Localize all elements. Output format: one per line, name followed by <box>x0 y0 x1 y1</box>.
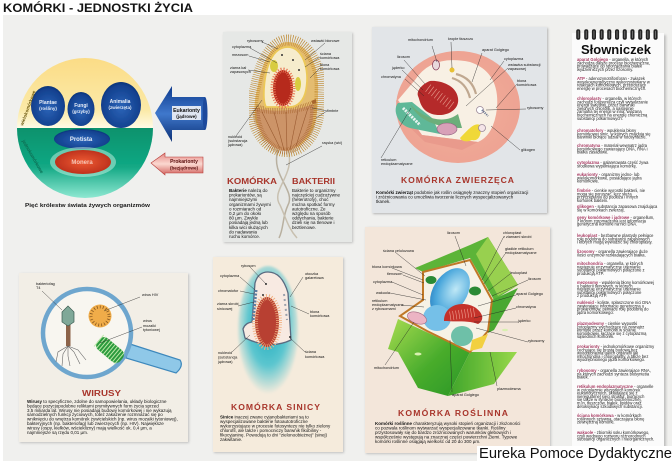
virus text: bakteryjnych (np. bakteriofag) lub zwierzęcych (np. HIV). Największe <box>27 421 164 426</box>
glossary entries: cechujące się prostą budową bez <box>577 347 638 352</box>
plant cell labels: aparat Golgiego <box>452 393 479 397</box>
glossary entries: genetyczna komórki na nici DNA. <box>577 222 637 227</box>
glossary entries: wysokoenergetyczny wykorzystywany w <box>577 79 650 84</box>
glossary entries: na których zachodzi synteza biosyntetia <box>577 371 650 376</box>
arrow: eukarionty <box>155 86 208 142</box>
glossary entries: mezosomy - wpuklenia błony komórkowej <box>577 280 654 285</box>
bacteria text: do nadawania <box>229 229 258 234</box>
glossary entries: wakuole - zbiorniki soku komórkowego, <box>576 430 649 435</box>
side labels: wielokomórkowe <box>19 89 37 127</box>
glossary entries: białek. <box>577 375 589 380</box>
glossary entries: lizosomy - organella zawierające duże <box>577 249 649 254</box>
kingdom labels: (rośliny) <box>39 106 57 111</box>
glossary entries: zamiana tej energii w inną, wiązaną <box>577 109 642 114</box>
glossary entries: czyli wodnego roztworu różnorodnych <box>577 433 646 438</box>
glossary entries: środkowa wypełniająca komórkę. <box>577 163 637 168</box>
animal cell labels: błona <box>517 79 527 83</box>
plant cell labels <box>372 231 545 397</box>
animal cell text: Komórki zwierząt podobnie jak roślin osiągnęły znaczny stopień organizacji <box>376 190 528 195</box>
kingdom labels: Animalia <box>110 99 131 105</box>
bacteria text: autotroficzne. Ze <box>292 206 326 211</box>
glossary entries: geny komórkowe i jądrowe - organellum, <box>577 215 654 220</box>
plant cell labels: chromatyna <box>516 305 537 309</box>
glossary entries: substancji pokarmowych. <box>577 116 623 121</box>
plant cell drawing <box>388 237 518 396</box>
glossary entries: mitochondria i chloroplasty, a także bez <box>577 354 648 359</box>
virus text: najmniejsze są rzędu 0,01 µm. <box>27 430 88 435</box>
cyanobacteria labels: sinicowej <box>217 307 233 311</box>
animal cell labels: endoplazmatyczne <box>381 162 413 166</box>
bacteria labels: komórkowa <box>320 56 340 60</box>
virus labels: wirus <box>143 319 152 323</box>
bacteria labels: fimbrie <box>327 109 338 113</box>
glossary entries: substancji organicznych i nieorganicznych. <box>577 437 654 442</box>
bacteria text: najmniejszymi <box>229 197 257 202</box>
glossary entries: rolę podobną do substancji zapasowych <box>577 236 650 241</box>
glossary entries: ATP - adenozynotrifosforan - związek <box>577 76 646 81</box>
bacteria heading <box>227 175 335 186</box>
glossary entries: glikogen - substancja zapasowa znajdująca <box>577 204 658 209</box>
plant cell labels: gładkie retikulum <box>505 247 534 251</box>
plant cell labels: plazmodesma <box>497 387 522 391</box>
animal cell labels <box>381 37 544 166</box>
glossary entries: zachodzi fotosynteza czyli wytwarzanie <box>577 99 649 104</box>
arrow: prokarionty: (bezjądrowe) <box>170 166 199 170</box>
plant cell text: komórki roślinne osiągają wielkość od 20 do 300 µm. <box>375 439 480 444</box>
cyanobacteria text: zakwitanie. <box>220 437 242 442</box>
plant cell labels: endoplazmatyczne <box>372 303 404 307</box>
cyanobacteria text: Sinice inaczej zwane cyjanobakteriami są to <box>220 414 309 420</box>
glossary entries: retikulum endoplazmatyczne - organelle <box>577 384 654 389</box>
glossary entries: wyodrębnionego jądra komórkowego. <box>577 357 645 362</box>
glossary entries: nieregularnej sieci struktur, biorących <box>577 394 645 399</box>
plant cell labels: chloroplast <box>503 231 522 235</box>
glossary entries: następuje enzymatyczne utlenianie <box>577 287 641 292</box>
glossary entries: ściana komórkowa - w komórkach <box>577 413 642 418</box>
cyanobacteria labels: ziarna skrobi <box>217 302 239 306</box>
glossary entries: mogą się poruszać, lecz służą <box>577 191 632 196</box>
glossary entries: z którym zgromadzona jest informacja <box>577 218 647 223</box>
plant cell text: co pozwala roślinom wytwarzać wyspecjalizowane tkanki. Rośliny <box>375 426 506 430</box>
glossary entries: chloroplasty - organella, w których <box>577 96 642 101</box>
bacteria text: Bakterie należą do <box>229 188 268 193</box>
virus labels: tytoniowej <box>143 328 160 332</box>
glossary entries: się w komórkach zwierząt. <box>577 207 625 212</box>
virus text: będące pozycjopodobne reliktami prymitywnych form życia sprzed <box>27 403 159 408</box>
glossary entries: jądra komórkowego. <box>576 310 614 315</box>
glossary entries: u bakterii tlenowych, w których <box>577 283 633 288</box>
glossary entries: zachodzą dalsze procesy biochemiczne, <box>577 60 650 65</box>
plant cell labels: tlenosom <box>387 272 402 276</box>
glossary entries: cytoplazma - galaretowata część żywa <box>577 160 649 165</box>
cyanobacteria labels: cytoplazma <box>220 274 240 278</box>
bacteria labels: ziarna kał <box>230 66 246 70</box>
cyanobacteria labels: błona <box>310 310 320 314</box>
bacteria text: dzieli się na tlenowe i <box>292 220 335 225</box>
virus text <box>27 399 178 435</box>
panel: five kingdoms diagram <box>17 58 208 209</box>
glossary entries: następuje enzymatyczne utlenianie <box>577 264 641 269</box>
plant cell labels: aparat Golgiego <box>516 292 543 296</box>
panel: plant cell <box>365 227 551 454</box>
cyanobacteria text: wyspecjalizowane bakterie fotoautotroficzne <box>220 419 308 424</box>
animal cell labels: cytoplazma <box>504 57 524 61</box>
cyanobacteria drawing <box>238 266 298 394</box>
plant cell labels: błona komórkowa <box>372 265 403 269</box>
bacteria labels: (substancja <box>228 139 248 143</box>
animal cell labels: krople tłuszczu <box>448 37 473 41</box>
kingdom labels: Monera <box>71 160 93 166</box>
glossary entries: m.in. tłuszczów, białek, lipidów oraz <box>577 400 641 406</box>
bacteria labels: ściana <box>320 52 332 56</box>
glossary entries: w cytoplazmie wszystkich komórek <box>577 387 641 392</box>
cyanobacteria labels: rybosom <box>241 264 256 268</box>
plant cell text <box>375 421 520 444</box>
arrow: prokarionty: Prokarionty <box>170 159 198 165</box>
glossary entries: roślinnych sztywna, otaczająca błonę <box>577 416 645 421</box>
cyanobacteria text <box>220 414 331 442</box>
glossary entries: komórkowe. <box>577 179 599 184</box>
animal cell text: i zróżnicowania co umożliwia tworzenie licznych wyspecjalizowanych <box>376 194 514 200</box>
plant cell text: współcześnie występują na znacznej części powierzchni Ziemi. Typowe <box>375 434 518 440</box>
glossary entries: wielokomórkowe, posiadające jądra <box>577 175 642 180</box>
glossary entries <box>576 57 658 442</box>
bacteria text: ruchu komórce. <box>229 234 260 239</box>
animal cell labels: rybosomy <box>527 106 544 110</box>
bacteria labels: rzęska (wić) <box>322 141 343 145</box>
glossary entries: przyczepianiu do podłoża i innych <box>577 195 639 200</box>
plant cell labels: ściana celulozowa <box>383 249 415 253</box>
bacteria labels: cytoplazma <box>232 45 252 49</box>
kingdom labels <box>39 99 132 166</box>
plant cell text: przystosowały się do bardzo zróżnicowanych warunków glebowych i <box>375 430 511 435</box>
bacteria labels: komórkowa <box>320 67 340 71</box>
bacteria text: beztlenowe. <box>292 225 316 230</box>
cyanobacteria labels: nukleoid <box>218 351 232 355</box>
glossary entries: biochemicznych na energię chemiczną <box>577 112 648 118</box>
side labels: jednokomórkowe <box>21 138 45 175</box>
glossary entries: wydzielniczych przez lizosomy. <box>577 67 633 72</box>
animal cell labels: komórkowa <box>517 83 537 87</box>
glossary entries: wyodrębnienia takich organelli jak <box>577 351 639 356</box>
plant cell labels: endoplazmatyczne <box>505 251 537 255</box>
glossary entries: barwniki biorące udział w fotosyntezie. <box>577 135 647 140</box>
plant cell heading: KOMÓRKA ROŚLINNA <box>398 407 508 418</box>
title: KOMÓRKI - JEDNOSTKI ŻYCIA <box>3 2 193 15</box>
glossary entries: leukoplast - bezbarwne plastydy pełniące <box>577 233 654 238</box>
plant cell labels: cytoplazma <box>373 280 393 284</box>
notebook spiral <box>577 30 657 39</box>
animal cell text <box>376 190 528 204</box>
plant cell text: Komórki roślinne charakteryzują wysoki stopień organizacji i złożoności <box>375 421 520 426</box>
arrow: eukarionty: (jądrowe) <box>176 114 197 119</box>
cyanobacteria text: fikocyjaninę. Powodują to dni "zielonoobieżnej" (sinej) <box>220 432 328 438</box>
bacteria text: oddychania, bakterie <box>292 216 334 221</box>
plant cell labels: retikulum <box>372 299 387 303</box>
bacteria text: 0,2 µm do około <box>229 211 262 216</box>
glossary entries: zewnętrzną komórki. <box>577 420 615 425</box>
glossary entries: mitochondria - organella, w których <box>577 261 644 266</box>
bacteria text: można spotkać formy <box>292 202 336 207</box>
bacteria labels: nukleoid <box>228 135 242 139</box>
plant cell labels: z rybosomami <box>372 307 396 311</box>
virus labels: bakteriofag <box>36 282 55 286</box>
glossary entries: prokariontów, pełniące rolę podobną do <box>577 307 649 312</box>
glossary entries: komórki przez komórki w ścianie <box>577 328 637 333</box>
glossary entries: cytoplazmy wychodzące na zewnątrz <box>577 324 644 329</box>
glossary entries: komórkowej, łączące się z cytoplazmą <box>577 331 647 336</box>
panel: animal cell <box>372 27 548 214</box>
glossary entries: eukarionty - organizmy jedno- lub <box>577 172 640 177</box>
plant cell labels: rybosomy <box>528 339 545 343</box>
animal cell labels: mitochondrium <box>408 38 433 42</box>
animal cell labels: chromatyna <box>381 75 402 79</box>
arrow: prokarionty <box>151 153 203 175</box>
virus text: samodzielnych funkcji życiowych, toteż zakażenie rozmnażać się po <box>27 412 163 417</box>
glossary entries: zielonych chlorofili, a następnie <box>577 106 634 111</box>
glossary entries: aparat Golgiego - organella, w których <box>577 57 649 62</box>
glossary entries: rybosomy - organella zawierające RNA, <box>577 368 651 373</box>
glossary entries: fimbrie - cienkie wyrostki bakterii, nie <box>577 188 646 193</box>
bacteria heading: KOMÓRKA <box>227 175 277 186</box>
plant cell labels: z ziarnami skrobi <box>503 235 532 239</box>
plant cell labels: mitochondrium <box>374 366 399 370</box>
glossary entries: komórek bakterii. <box>577 198 608 203</box>
cyanobacteria labels: komórkowa <box>305 355 325 359</box>
bacteria text: Bakterie to organizmy <box>292 188 336 193</box>
bacteria text: najczęściej cudzożywne <box>292 193 341 198</box>
bacteria text: prokariontów, są <box>229 193 262 198</box>
kingdoms circle <box>17 58 153 198</box>
plant cell labels: lizosom <box>447 231 460 235</box>
panel: glossary notebook <box>572 30 666 449</box>
kingdom labels: (zwierzęta) <box>108 105 132 110</box>
bacteria labels: rybosomy <box>247 39 264 43</box>
plant cell labels: lizosom <box>528 277 541 281</box>
animal cell text: tkanek. <box>376 199 391 204</box>
bacteria text: względu na sposób <box>292 211 331 216</box>
virus labels: wirus HIV <box>142 293 159 297</box>
glossary entries: energii świetlnej, przez barwniki <box>577 103 635 108</box>
glossary entries: zawierające informacje genetyczną u <box>577 303 644 308</box>
animal cell labels: reticulum <box>381 158 396 162</box>
cyanobacteria labels: chromatofor <box>218 289 239 293</box>
virus heading: WIRUSY <box>82 388 121 398</box>
side labels <box>19 89 45 175</box>
bacteria text: (heterotrofy), choć <box>292 197 329 202</box>
glossary entries: plazmodesmy - cienkie wypustki <box>577 321 637 326</box>
cyanobacteria labels: jądrowa) <box>217 360 233 364</box>
glossary entries: chromatofory - wpuklenia błony <box>577 128 637 133</box>
glossary entries: prowadzące do sporządzania białek <box>577 64 643 69</box>
kingdom labels: Protista <box>70 137 93 143</box>
plant cell labels: wakuola <box>376 291 391 295</box>
glossary entries: produkcją ATP. <box>577 271 604 276</box>
glossary entries: substancji pokarmowych połączone z <box>577 268 645 273</box>
animal cell labels: aparat Golgiego <box>482 48 509 52</box>
animal cell drawing <box>396 51 520 163</box>
virus text: wirusy (ospy, kiełków, wścieklizny) mają wielkość ok. 0,4 µm, a <box>27 425 152 430</box>
glossary entries: komórkowego zawierający DNA, RNA i <box>577 146 648 151</box>
panel: cyanobacteria cell <box>213 257 344 453</box>
cyanobacteria labels: (substancja <box>218 356 238 360</box>
glossary entries: chromatyna - materiał wewnątrz jądra <box>577 143 648 148</box>
glossary entries: substancji pokarmowych połączone <box>577 290 642 295</box>
bacterium drawing <box>252 40 320 238</box>
bacteria labels: błona <box>320 63 330 67</box>
bacteria labels: mezosom <box>232 53 248 57</box>
kingdom labels: Plantae <box>39 100 57 106</box>
glossary entries: eukariotycznych, składające się z <box>577 391 638 396</box>
glossary entries: reakcjach komórkowych, przenoszący <box>577 83 647 88</box>
animal cell labels: wstawka substancji <box>508 63 541 67</box>
virus text: 3,5 miliarda lat. Wirusy nie posiadają budowy komórkowej i nie wykazują <box>27 408 172 413</box>
plant cell labels: jąderko <box>517 319 530 323</box>
caption: Pięć królestw świata żywych organizmów <box>25 203 151 209</box>
plant cell labels: leukoplast <box>510 271 528 275</box>
cyanobacteria labels: otoczka <box>305 272 319 276</box>
glossary entries: sąsiednich komórek. <box>577 334 614 339</box>
cyanobacteria text: chlorofil, ale także i pomocniczy barwnik fikobiliny - <box>220 428 322 433</box>
cyanobacteria labels: ściana <box>305 350 317 354</box>
kingdom labels: Fungi <box>74 103 88 109</box>
cyanobacteria heading: KOMÓRKA SINICY <box>231 401 320 412</box>
panel: viruses <box>19 273 189 443</box>
glossary entries: ilości enzymów rozkładających białka. <box>577 252 646 257</box>
bacteria labels: wstawki błonowe <box>311 39 340 43</box>
virus labels: mozaiki <box>143 324 156 328</box>
virus labels <box>36 282 160 332</box>
bacteria text <box>229 188 341 239</box>
cyanobacteria labels <box>217 264 330 364</box>
animal cell labels: zapasowej <box>508 67 526 71</box>
bacteria text: organizmami żywymi <box>229 202 271 207</box>
magnifying glass and viruses <box>43 289 181 377</box>
panel: bacteria cell <box>223 32 353 243</box>
bacteria text: kilka wici służących <box>229 225 268 230</box>
animal cell labels: jąderko <box>391 66 404 70</box>
glossary entries: i których mogą wywodzić się chloroplasty. <box>577 240 653 245</box>
animal cell labels: lizosom <box>397 55 410 59</box>
arrow: eukarionty: Eukarionty <box>173 108 200 114</box>
bacteria text: o rozmiarach od <box>229 206 262 211</box>
cyanobacteria labels: galaretowa <box>305 276 324 280</box>
animal cell heading: KOMÓRKA ZWIERZĘCA <box>401 174 514 185</box>
bacteria labels: jądrowa) <box>227 143 243 147</box>
bacteria labels <box>227 39 343 147</box>
bacteria text: posiadają jedną lub <box>229 220 268 225</box>
glossary entries: detoksykacji szkodliwych substancji. <box>577 404 643 409</box>
kingdom labels: (grzyby) <box>72 109 90 114</box>
glossary entries: prokarionty - jednokomórkowe organizmy <box>577 344 655 349</box>
bacteria heading: BAKTERII <box>292 176 335 186</box>
glossary entries: się także w syntezie biochemicznej, <box>577 397 642 402</box>
virus text: wniknięciu do wnętrza komórek żywicielskich (np. wirus mozaiki tytoniowej), <box>27 417 178 422</box>
glossary entries: białka zasadowe. <box>577 150 608 155</box>
bacteria labels: zapasowych <box>230 70 251 74</box>
glossary heading: Słowniczek <box>581 42 652 57</box>
bacteria text: 80 µm. Zwykle <box>229 216 259 221</box>
animal cell labels: glikogen <box>521 148 535 152</box>
glossary entries: komórkowej sinic, w których znajdują się <box>577 131 651 136</box>
glossary entries: z produkcją ATP. <box>577 293 607 298</box>
virus labels: T4 <box>36 286 40 290</box>
virus text: Wirusy to specyficzne, zdolne do samopowielania, układy biologiczne <box>27 399 167 404</box>
glossary entries: nukleoid - koliste, spłaszczone nici DNA <box>577 300 651 305</box>
glossary entries: energię w procesach biochemicznych. <box>577 86 646 91</box>
cyanobacteria text: wykorzystujące w procesie fotosyntezy nie tylko zielony <box>220 424 331 428</box>
cyanobacteria labels: komórkowa <box>310 314 330 318</box>
